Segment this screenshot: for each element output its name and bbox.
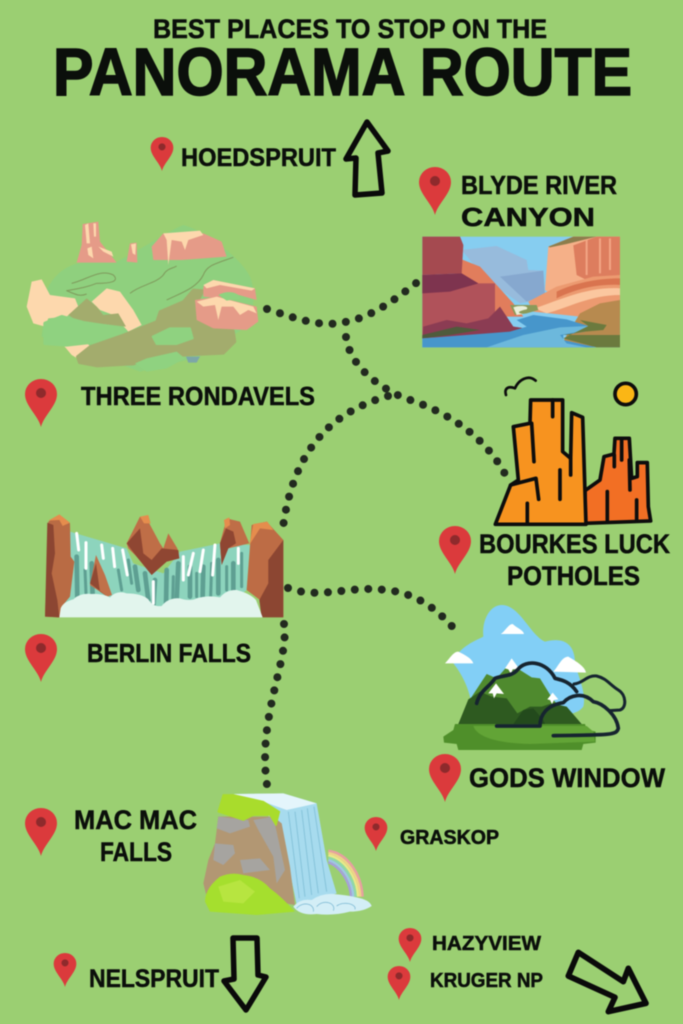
pin and label: Gods Window: [429, 754, 665, 802]
illustration: Three Rondavels: [27, 222, 258, 372]
pin and label: Mac Mac Falls: FALLS: [100, 837, 172, 867]
pin and label: Blyde River Canyon: CANYON: [461, 202, 595, 232]
pin and label: Graskop: GRASKOP: [400, 827, 499, 849]
pin and label: Bourkes Luck Potholes: [439, 526, 670, 591]
title: PANORAMA ROUTE: [53, 35, 632, 110]
icon: bird: [505, 378, 536, 395]
pin and label: Hoedspruit: [151, 137, 336, 172]
illustration: Bourkes Luck Potholes: [495, 378, 651, 524]
pin and label: Graskop: [365, 817, 499, 851]
arrow: south-east to Kruger: [568, 952, 646, 1012]
pin and label: Hazyview: [399, 928, 541, 962]
pin and label: Three Rondavels: THREE RONDAVELS: [81, 381, 315, 411]
pin and label: Nelspruit: NELSPRUIT: [89, 965, 219, 993]
pin and label: Hazyview: HAZYVIEW: [432, 933, 541, 955]
dotted route paths: [265, 280, 509, 791]
arrow: south to Nelspruit: [224, 938, 266, 1010]
illustration: Blyde River Canyon: [422, 237, 620, 347]
right rock tower: [585, 438, 651, 523]
pin and label: Gods Window: GODS WINDOW: [469, 763, 665, 793]
pin and label: Mac Mac Falls: [25, 805, 197, 867]
pin and label: Blyde River Canyon: BLYDE RIVER: [461, 170, 617, 200]
pin and label: Kruger NP: [388, 966, 543, 1000]
illustration: Gods Window: [443, 605, 625, 750]
pin and label: Nelspruit: [54, 953, 219, 993]
pin and label: Bourkes Luck Potholes: POTHOLES: [507, 561, 640, 591]
pin and label: Berlin Falls: [25, 634, 251, 682]
pin and label: Blyde River Canyon: [419, 167, 617, 232]
illustration: Berlin Falls: [45, 514, 283, 617]
pin and label: Mac Mac Falls: MAC MAC: [74, 805, 197, 835]
icon: sun: [615, 383, 636, 405]
pin and label: Three Rondavels: [25, 379, 315, 427]
pin and label: Berlin Falls: BERLIN FALLS: [87, 638, 251, 668]
left rock tower: [495, 400, 586, 524]
illustration: Mac Mac Falls: [203, 793, 372, 915]
title: BEST PLACES TO STOP ON THE: [153, 14, 547, 44]
pin and label: Kruger NP: KRUGER NP: [430, 970, 543, 992]
arrow: north to Hoedspruit: [346, 122, 388, 195]
pin and label: Hoedspruit: HOEDSPRUIT: [181, 144, 336, 172]
